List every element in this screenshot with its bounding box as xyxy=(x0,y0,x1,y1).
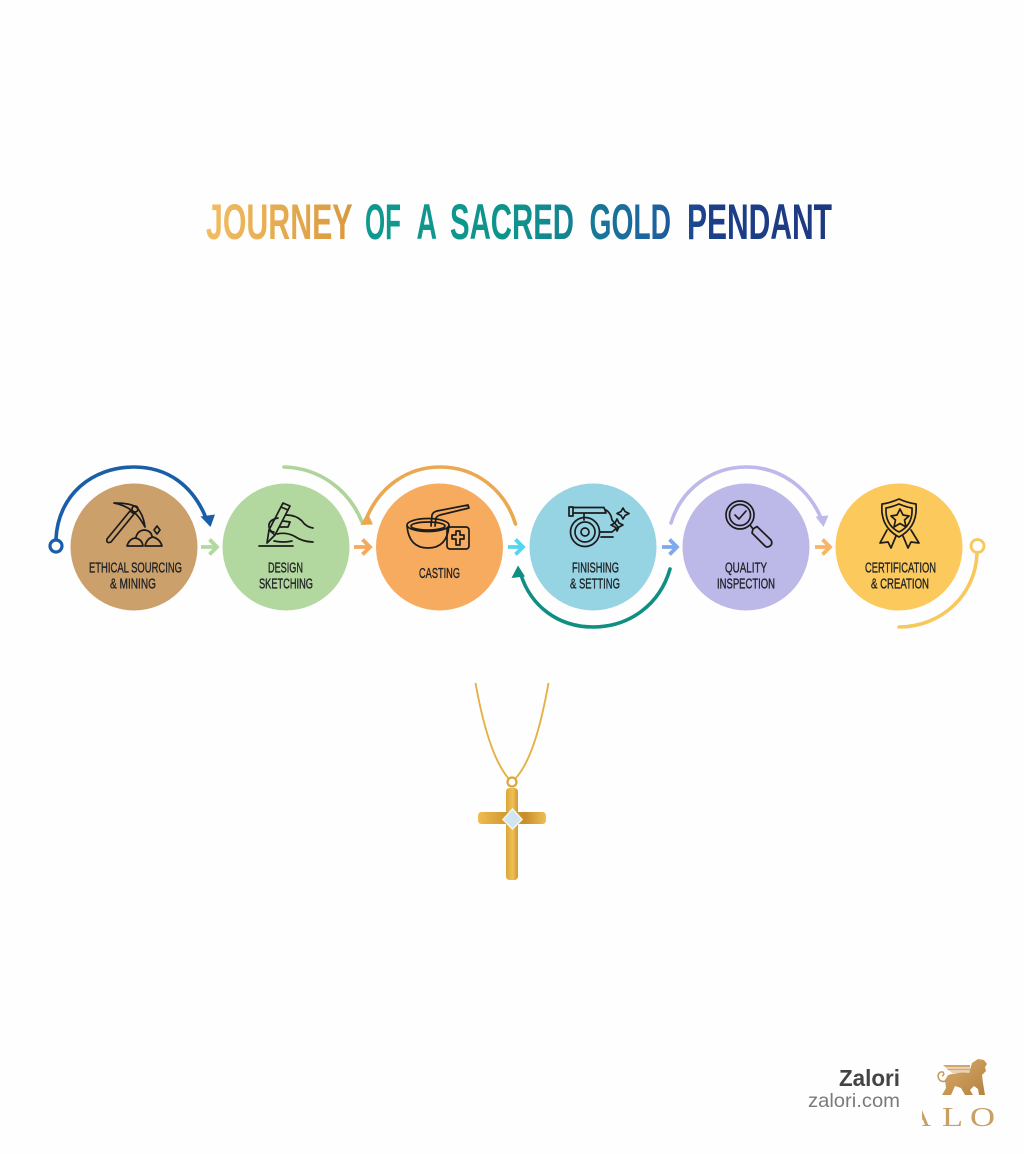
infographic canvas xyxy=(48,204,994,1126)
arrow: green arc xyxy=(284,467,362,522)
label: design sketching: SKETCHING xyxy=(259,576,313,592)
label: ethical sourcing and mining xyxy=(89,560,182,592)
icon: pickaxe and ore xyxy=(107,503,162,546)
brand url: zalori.com xyxy=(808,1090,900,1112)
pendant: gold cross on chain xyxy=(476,683,548,880)
arrow: step 2 to 3 xyxy=(354,540,370,554)
step 3: casting xyxy=(376,484,503,610)
arrow: teal arc xyxy=(512,566,670,627)
title: GOLD xyxy=(590,194,671,250)
cross xyxy=(478,788,546,880)
arrow: step 5 to 6 xyxy=(815,540,830,554)
label: finishing and setting: FINISHING xyxy=(572,560,619,576)
title: JOURNEY xyxy=(206,194,352,250)
title: A xyxy=(416,194,437,250)
label: certification and creation xyxy=(865,560,936,592)
logo: winged lion xyxy=(938,1059,987,1095)
logo: clipped wordmark: L xyxy=(942,1102,963,1132)
icon: shield badge with ribbons xyxy=(880,499,919,548)
arrow: step 4 to 5 xyxy=(662,540,677,554)
circle: certification and creation xyxy=(836,484,962,610)
logo: clipped wordmark: A xyxy=(909,1102,932,1132)
gemstone xyxy=(503,809,522,829)
title xyxy=(206,194,832,250)
title: SACRED xyxy=(450,194,574,250)
circle: design sketching xyxy=(222,484,350,610)
label: design sketching xyxy=(259,560,313,592)
icon: magnifier with check xyxy=(726,501,772,547)
label: quality inspection xyxy=(717,560,775,592)
icon: crucible and cross mold xyxy=(407,505,469,549)
icon: polishing wheel with sparkles xyxy=(569,507,629,546)
step 5: quality inspection xyxy=(682,484,810,610)
title: PENDANT xyxy=(687,194,832,250)
brand name: Zalori xyxy=(839,1065,900,1091)
logo: clipped wordmark: O xyxy=(970,1102,995,1132)
step 1: ethical sourcing and mining xyxy=(70,484,198,610)
step 2: design sketching xyxy=(222,484,350,610)
label: certification and creation: & CREATION xyxy=(871,576,929,592)
arrow: yellow arc to end node xyxy=(899,540,984,627)
icon: hand sketching xyxy=(259,503,313,546)
chain xyxy=(476,683,548,779)
label: ethical sourcing and mining: ETHICAL SOURCING xyxy=(89,560,182,576)
label: quality inspection: QUALITY xyxy=(725,560,767,576)
label: certification and creation: CERTIFICATION xyxy=(865,560,936,576)
label: finishing and setting: & SETTING xyxy=(570,576,620,592)
label: quality inspection: INSPECTION xyxy=(717,576,775,592)
logo: clipped wordmark xyxy=(922,1108,994,1126)
step 4: finishing and setting xyxy=(530,484,656,610)
arrow: purple arc xyxy=(671,467,828,527)
bail ring xyxy=(508,778,516,786)
label: ethical sourcing and mining: & MINING xyxy=(110,576,156,592)
step 6: certification and creation xyxy=(836,484,962,610)
label: casting: CASTING xyxy=(419,566,460,582)
arrow: step 1 to 2 xyxy=(201,540,217,554)
circle: casting xyxy=(376,484,503,610)
title: OF xyxy=(365,194,401,250)
arrow: blue arc from start node xyxy=(50,467,215,552)
arrow: orange arc xyxy=(360,467,516,525)
label: finishing and setting xyxy=(570,560,620,592)
circle: quality inspection xyxy=(682,484,810,610)
circle: ethical sourcing xyxy=(70,484,198,610)
label: design sketching: DESIGN xyxy=(268,560,303,576)
arrow: step 3 to 4 xyxy=(508,540,523,554)
circle: finishing and setting xyxy=(530,484,656,610)
